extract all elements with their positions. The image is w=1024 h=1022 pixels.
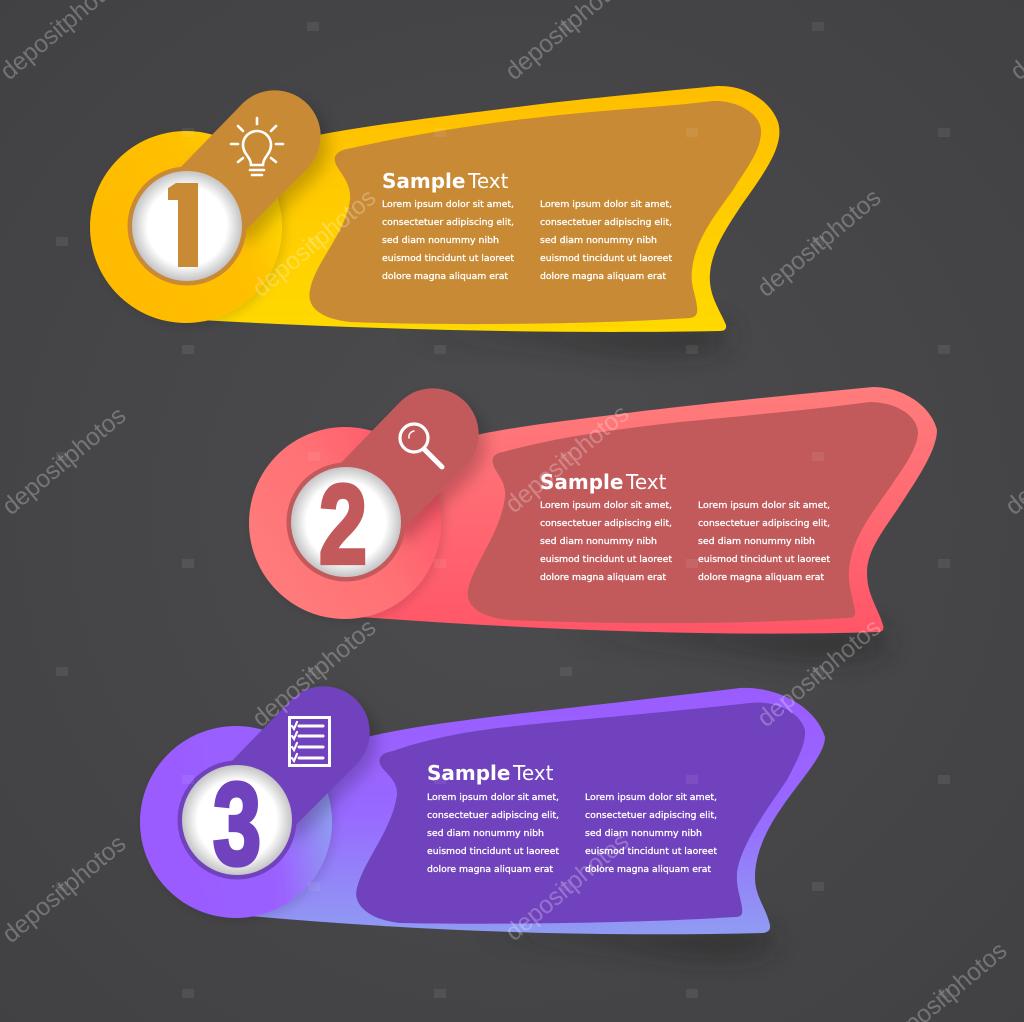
main circle 2 <box>249 427 441 619</box>
banner 2: coral <box>249 387 937 661</box>
text block 2: consectetuer adipiscing elit, <box>698 519 830 529</box>
text block 3: euismod tincidunt ut laoreet <box>585 847 717 857</box>
number badge 1 <box>128 166 246 286</box>
text block 2: Lorem ipsum dolor sit amet, <box>698 501 830 511</box>
text block 3: sed diam nonummy nibh <box>427 829 544 839</box>
watermarks: depositphotos <box>500 827 634 947</box>
text block 3: dolore magna aliquam erat <box>585 865 711 875</box>
text block 2: Lorem ipsum dolor sit amet, <box>540 501 672 511</box>
banner 3: purple <box>140 686 825 959</box>
watermarks: depositphotos <box>0 829 131 949</box>
number badge 1: 1 <box>150 157 222 303</box>
text block 1 <box>382 169 672 282</box>
text block 2: Sample <box>540 470 623 494</box>
watermarks: depositphotos <box>500 399 634 519</box>
inner panel 3 <box>356 703 805 924</box>
watermarks: depositphotos <box>752 183 886 303</box>
text block 1: Sample <box>382 169 465 193</box>
text block 3: consectetuer adipiscing elit, <box>585 811 717 821</box>
text block 3: Lorem ipsum dolor sit amet, <box>427 793 559 803</box>
watermarks: depositphotos <box>752 613 886 733</box>
text block 2: consectetuer adipiscing elit, <box>540 519 672 529</box>
number badge 2: 2 <box>319 462 367 588</box>
inner panel 1 <box>309 101 761 324</box>
text block 1: Lorem ipsum dolor sit amet, <box>382 200 514 210</box>
number badge 3: 3 <box>213 758 261 889</box>
text block 2: euismod tincidunt ut laoreet <box>540 555 672 565</box>
watermarks: depositphotos <box>247 183 381 303</box>
text block 3 <box>427 761 717 875</box>
text block 1: dolore magna aliquam erat <box>540 272 666 282</box>
text block 1: Text <box>467 169 509 193</box>
text block 2 <box>540 470 830 583</box>
main circle 3 <box>140 726 332 918</box>
pill tab 2 <box>336 388 479 534</box>
number badge 2 <box>286 462 406 588</box>
watermarks: depositphotos <box>0 401 131 521</box>
text block 1: sed diam nonummy nibh <box>382 236 499 246</box>
text block 2: sed diam nonummy nibh <box>540 537 657 547</box>
inner panel 2 <box>468 402 918 623</box>
text block 3: consectetuer adipiscing elit, <box>427 811 559 821</box>
text block 3: euismod tincidunt ut laoreet <box>427 847 559 857</box>
text block 3: Lorem ipsum dolor sit amet, <box>585 793 717 803</box>
icon: light bulb <box>231 118 283 175</box>
pill tab 3 <box>227 686 370 832</box>
ground shadow 3 <box>480 928 775 959</box>
number badge 3 <box>178 758 296 889</box>
ground shadow 2 <box>560 628 888 661</box>
icon: magnifier <box>400 424 442 467</box>
text block 1: Lorem ipsum dolor sit amet, <box>540 200 672 210</box>
main circle 1 <box>90 131 282 323</box>
icon: checklist <box>290 718 330 766</box>
text block 2: dolore magna aliquam erat <box>540 573 666 583</box>
ground shadow 1 <box>400 325 728 356</box>
outer band 1 <box>200 86 779 332</box>
pill tab 1 <box>178 90 321 236</box>
text block 1: sed diam nonummy nibh <box>540 236 657 246</box>
text block 3: sed diam nonummy nibh <box>585 829 702 839</box>
text block 1: euismod tincidunt ut laoreet <box>382 254 514 264</box>
outer band 3 <box>250 688 825 934</box>
text block 1: consectetuer adipiscing elit, <box>540 218 672 228</box>
outer band 2 <box>360 387 937 634</box>
text block 2: Text <box>625 470 667 494</box>
watermarks: depositphotos <box>247 613 381 733</box>
text block 2: sed diam nonummy nibh <box>698 537 815 547</box>
banner 1: yellow <box>90 86 779 356</box>
text block 1: consectetuer adipiscing elit, <box>382 218 514 228</box>
text block 2: euismod tincidunt ut laoreet <box>698 555 830 565</box>
text block 1: dolore magna aliquam erat <box>382 272 508 282</box>
text block 3: Sample <box>427 761 510 785</box>
text block 2: dolore magna aliquam erat <box>698 573 824 583</box>
text block 3: dolore magna aliquam erat <box>427 865 553 875</box>
text block 3: Text <box>512 761 554 785</box>
text block 1: euismod tincidunt ut laoreet <box>540 254 672 264</box>
